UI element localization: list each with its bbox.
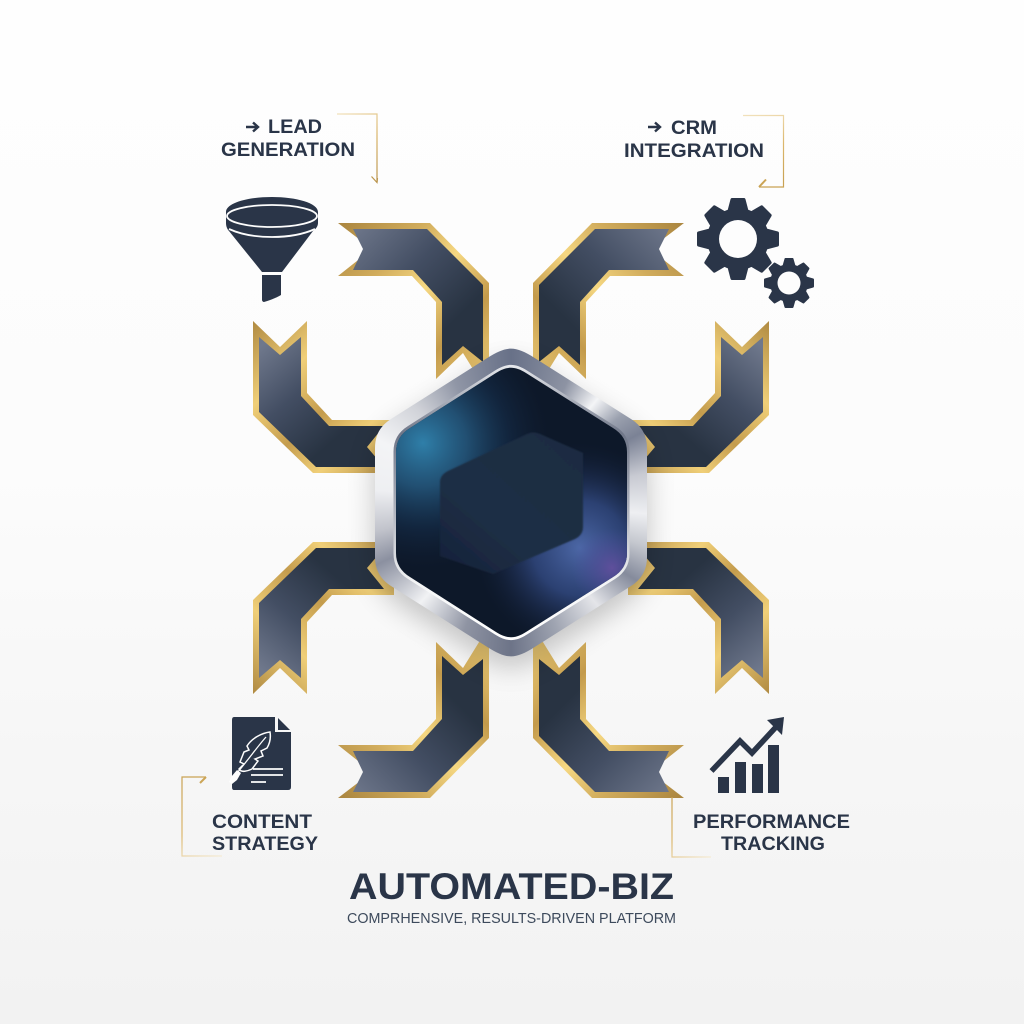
small gear [765,259,813,307]
core: bright rim [394,365,630,640]
connector: content strategy [182,777,222,856]
arrow: bottom-right vertical [533,626,684,798]
label: lead generation: GENERATION [221,140,355,161]
label: performance tracking: PERFORMANCE [693,812,850,833]
subtitle: COMPRHENSIVE, RESULTS-DRIVEN PLATFORM [347,910,676,927]
icon: growth chart [712,717,784,793]
title: AUTOMATED-BIZ [349,866,674,907]
arrow: lower-left horizontal [253,542,394,694]
connector: crm integration [743,116,784,187]
hexagon: dark core [394,364,630,640]
arrow: upper-right horizontal [628,321,769,473]
label: performance tracking: TRACKING [721,834,825,855]
icon: document with quill [229,717,291,790]
connector: performance tracking [672,797,711,857]
core: inner block [440,432,583,574]
icon: funnel [226,197,318,302]
arrow: top-right vertical [533,223,684,395]
core: blue gradient panel [396,368,627,638]
label: crm integration: INTEGRATION [624,141,764,162]
arrow: lower-right horizontal [628,542,769,694]
label: lead generation: LEAD [268,117,322,138]
arrow: upper-left horizontal [253,321,394,473]
arrow: top-left vertical [338,223,489,395]
label: crm integration: CRM [671,118,717,139]
arrow: bottom-left vertical [338,626,489,798]
label: content strategy [212,812,318,855]
label: performance tracking [693,812,850,855]
connector: lead generation [337,114,378,182]
label: crm integration [624,118,764,162]
large gear [698,200,778,278]
hexagon: metallic ring [375,348,647,656]
label: lead generation [221,117,355,161]
label: content strategy: CONTENT [212,812,312,833]
label: content strategy: STRATEGY [212,834,318,855]
icon: gears [698,200,813,307]
